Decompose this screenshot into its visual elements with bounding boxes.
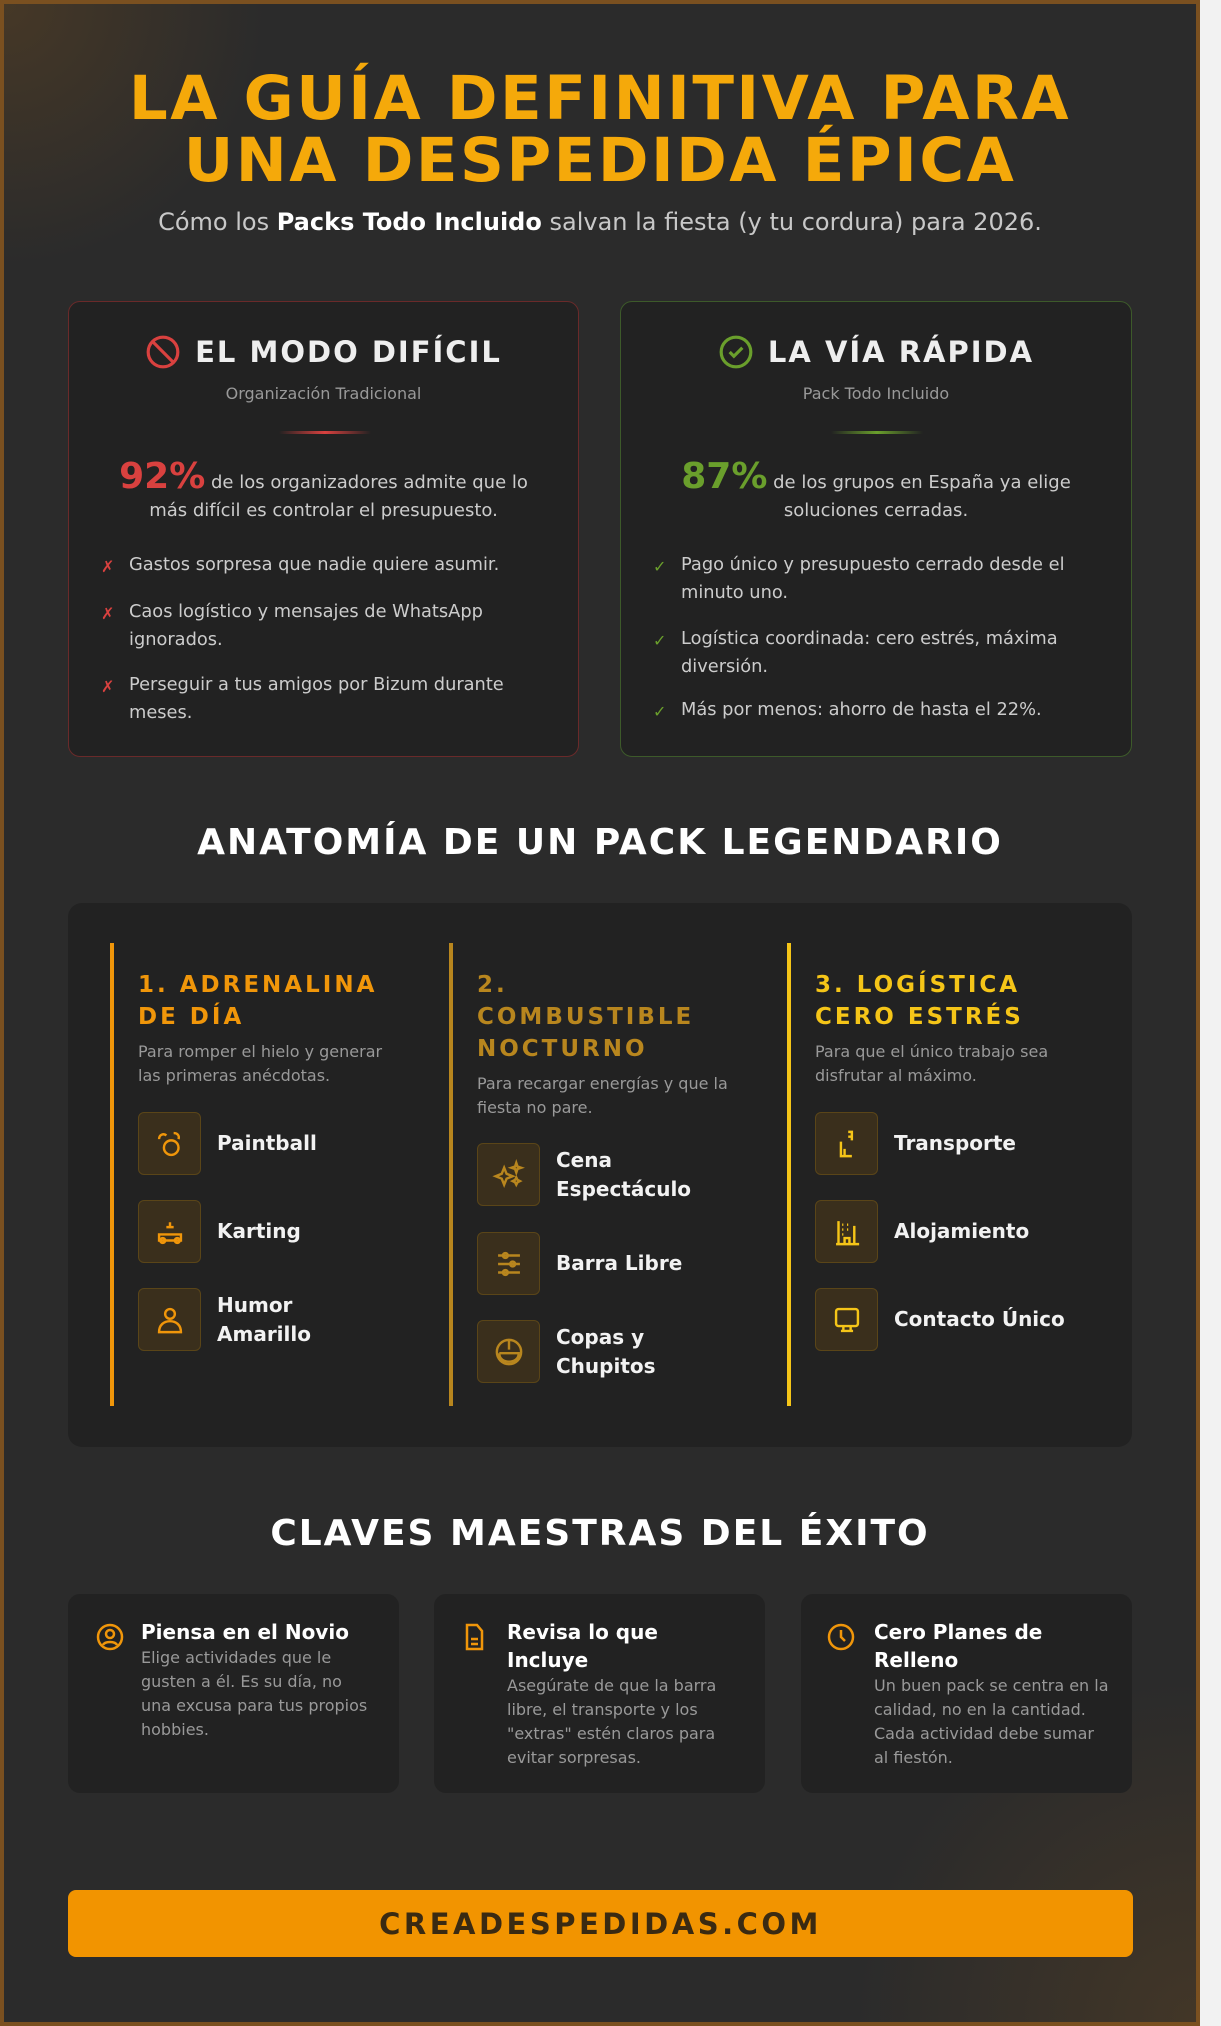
item: paintball: Paintball <box>217 1131 317 1155</box>
item: humor amarillo: Humor <box>217 1292 292 1316</box>
item: barra libre <box>477 1232 682 1295</box>
column title <box>138 972 377 1030</box>
item: paintball <box>138 1112 317 1175</box>
footer button: CREADESPEDIDAS.COM <box>379 1906 822 1940</box>
item: alojamiento <box>815 1200 1029 1263</box>
item: cena espectáculo <box>477 1143 691 1206</box>
item: cena espectáculo: Espectáculo <box>556 1176 691 1200</box>
key text: Asegúrate de que la barra libre, el transporte y los "extras" estén claros para evitar sorpresas. <box>507 1676 716 1767</box>
footer button <box>68 1890 1133 1957</box>
list: problems: ✗ <box>101 677 114 696</box>
column description: Para recargar energías y que la fiesta no pare. <box>477 1074 728 1117</box>
column title: COMBUSTIBLE <box>477 1004 694 1030</box>
column title: 1. ADRENALINA <box>138 972 377 998</box>
list: benefits: Pago único y presupuesto cerrado desde el minuto uno. <box>681 554 1065 603</box>
key text: Revisa lo que Incluye <box>507 1620 658 1672</box>
list: benefits: Más por menos: ahorro de hasta el 22%. <box>681 699 1042 720</box>
icon: person circle <box>96 1624 124 1650</box>
key text <box>874 1620 1109 1767</box>
list: benefits: ✓ <box>653 702 666 721</box>
column 3: logística <box>787 943 1065 1406</box>
column title: DE DÍA <box>138 1004 244 1030</box>
list: problems: ✗ <box>101 557 114 576</box>
key text: Un buen pack se centra en la calidad, no en la cantidad. Cada actividad debe sumar <box>874 1676 1109 1743</box>
item: karting <box>138 1200 301 1263</box>
list: problems <box>101 554 504 723</box>
column title: NOCTURNO <box>477 1036 648 1062</box>
column description: Para que el único trabajo sea disfrutar al máximo. <box>815 1042 1048 1085</box>
item: copas y chupitos: Chupitos <box>556 1354 656 1378</box>
item: contacto único <box>815 1288 1065 1351</box>
subheading: Organización Tradicional <box>226 384 421 403</box>
list: problems: ✗ <box>101 604 114 623</box>
subheading: Pack Todo Incluido <box>803 384 949 403</box>
key text: Elige actividades que le gusten a él. Es su día, no una excusa para tus propios hobbies. <box>141 1648 367 1739</box>
column title: 2. <box>477 972 508 998</box>
icon: document <box>466 1624 484 1650</box>
key text: al fiestón. <box>874 1748 953 1767</box>
title: LA GUÍA DEFINITIVA PARA <box>129 63 1071 134</box>
subtitle: Cómo los Packs Todo Incluido salvan la fiesta (y tu cordura) para 2026. <box>158 208 1042 236</box>
key text <box>507 1620 716 1767</box>
column 2: combustible nocturno <box>449 943 728 1406</box>
item: copas y chupitos <box>477 1320 656 1383</box>
column title <box>815 970 1024 1030</box>
heading: anatomía: ANATOMÍA DE UN PACK LEGENDARIO <box>197 822 1003 863</box>
item: contacto único: Contacto Único <box>894 1307 1065 1331</box>
item: barra libre: Barra Libre <box>556 1251 682 1275</box>
item: alojamiento: Alojamiento <box>894 1219 1029 1243</box>
list: benefits: ✓ <box>653 557 666 576</box>
column description: Para romper el hielo y generar las primeras anécdotas. <box>138 1042 382 1085</box>
item: transporte <box>815 1112 1016 1175</box>
heading: la vía rápida: LA VÍA RÁPIDA <box>768 335 1034 369</box>
item: cena espectáculo: Cena <box>556 1148 612 1172</box>
stat 92%: 92% de los organizadores admite que lo más difícil es controlar el presupuesto. <box>119 456 528 521</box>
key text: Piensa en el Novio <box>141 1620 349 1644</box>
column title: 3. LOGÍSTICA <box>815 972 1020 998</box>
list: problems: Perseguir a tus amigos por Bizum durante meses. <box>129 674 504 723</box>
key card: relleno <box>801 1594 1132 1793</box>
list: problems: Gastos sorpresa que nadie quiere asumir. <box>129 554 499 575</box>
key text: Cero Planes de Relleno <box>874 1620 1042 1672</box>
key card: incluye <box>434 1594 765 1793</box>
panel: modo difícil <box>68 301 579 757</box>
item: humor amarillo <box>138 1288 311 1351</box>
heading: el modo difícil: EL MODO DIFÍCIL <box>195 335 502 369</box>
item: copas y chupitos: Copas y <box>556 1324 644 1348</box>
item: karting: Karting <box>217 1219 301 1243</box>
column 1: adrenalina <box>110 943 382 1406</box>
list: benefits: ✓ <box>653 631 666 650</box>
list: problems: Caos logístico y mensajes de WhatsApp ignorados. <box>129 601 483 650</box>
column title: CERO ESTRÉS <box>815 1004 1024 1030</box>
panel: vía rápida <box>620 301 1132 757</box>
item: transporte: Transporte <box>894 1131 1016 1155</box>
key card: novio <box>68 1594 399 1793</box>
list: benefits: Logística coordinada: cero estrés, máxima diversión. <box>681 628 1058 677</box>
panel: anatomía <box>68 903 1132 1447</box>
column title <box>477 972 694 1062</box>
list: benefits <box>653 554 1065 721</box>
title: UNA DESPEDIDA ÉPICA <box>184 125 1016 196</box>
title <box>129 62 1071 196</box>
icon: clock <box>828 1624 854 1650</box>
stat 87%: 87% de los grupos en España ya elige soluciones cerradas. <box>681 456 1071 521</box>
item: humor amarillo: Amarillo <box>217 1322 311 1346</box>
heading: claves maestras: CLAVES MAESTRAS DEL ÉXITO <box>270 1513 930 1554</box>
